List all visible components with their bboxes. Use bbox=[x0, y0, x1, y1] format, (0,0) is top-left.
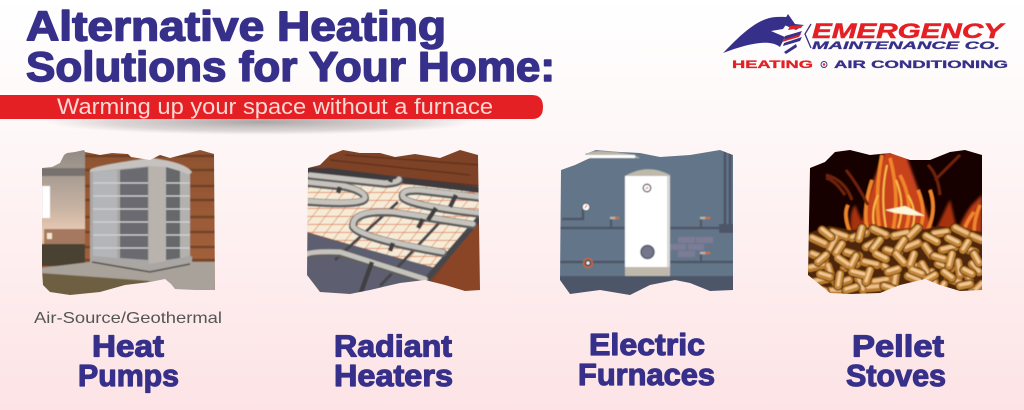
banner bar bbox=[0, 95, 543, 119]
label: electric furnaces bbox=[578, 327, 715, 392]
icon: swoosh and star bbox=[723, 14, 811, 54]
label: electric furnaces: Electric bbox=[589, 327, 705, 362]
title: Solutions for Your Home: bbox=[26, 43, 555, 90]
label: radiant heaters: Heaters bbox=[334, 358, 453, 393]
logo tagline: air conditioning: AIR CONDITIONING bbox=[834, 59, 1008, 71]
label: pellet stoves bbox=[846, 328, 946, 393]
label: radiant heaters: Radiant bbox=[334, 328, 452, 364]
pump bbox=[584, 259, 592, 267]
heating pipes bbox=[305, 175, 480, 280]
logo bbox=[723, 14, 1008, 71]
logo name: EMERGENCY bbox=[812, 20, 1006, 43]
label: radiant heaters bbox=[334, 328, 453, 393]
panel: electric furnaces illustration bbox=[558, 148, 735, 298]
caption: air-source/geothermal: Air-Source/Geothermal bbox=[34, 310, 222, 327]
title bbox=[26, 2, 555, 90]
banner text: Warming up your space without a furnace bbox=[57, 94, 493, 119]
label: electric furnaces: Furnaces bbox=[578, 357, 715, 392]
panel: heat pumps photo bbox=[40, 148, 216, 300]
wood pellets bbox=[806, 226, 984, 298]
flames bbox=[826, 152, 982, 240]
logo subname: MAINTENANCE CO. bbox=[812, 40, 1000, 52]
banner shadow bbox=[45, 109, 475, 135]
title: Alternative Heating bbox=[26, 2, 446, 50]
panel: pellet stoves photo bbox=[806, 148, 984, 298]
logo tagline: heating: HEATING bbox=[732, 59, 813, 71]
heat pump unit bbox=[90, 158, 192, 272]
label: heat pumps bbox=[78, 328, 179, 393]
label: pellet stoves: Stoves bbox=[846, 358, 946, 393]
label: heat pumps: Heat bbox=[92, 328, 164, 364]
gauge left bbox=[582, 203, 590, 211]
logo tagline: bullet bbox=[821, 62, 827, 68]
water tank bbox=[625, 169, 670, 276]
label: pellet stoves: Pellet bbox=[852, 328, 944, 364]
subtitle banner bbox=[0, 94, 543, 135]
label: heat pumps: Pumps bbox=[78, 358, 179, 393]
panel: radiant heaters photo bbox=[305, 148, 482, 298]
